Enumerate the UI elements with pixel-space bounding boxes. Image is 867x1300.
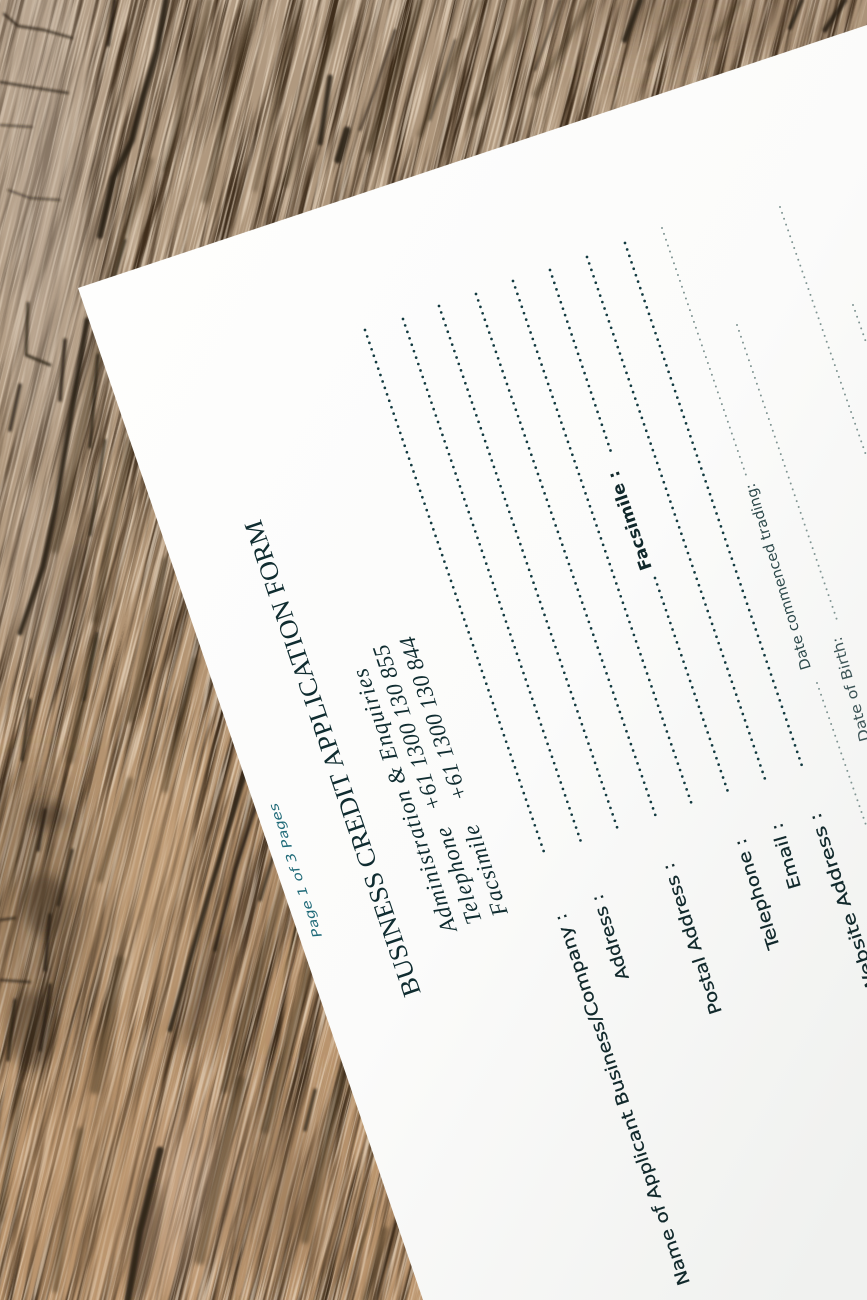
label: email: Email : — [767, 820, 806, 891]
telephone label: Telephone — [430, 824, 487, 928]
telephone number: +61 1300 130 855 — [368, 641, 447, 814]
label: applicant name: Name of Applicant Business/Company : — [551, 911, 695, 1288]
form field labels — [551, 468, 867, 1288]
facsimile label: Facsimile — [458, 822, 513, 920]
contact heading: Administration & Enquiries — [348, 665, 462, 938]
label: date commenced trading: Date commenced trading: — [743, 481, 815, 672]
dotted form lines — [365, 243, 802, 855]
contact details block — [348, 633, 513, 938]
faded dotted form lines — [662, 207, 867, 828]
label: postal address: Postal Address : — [659, 860, 727, 1017]
label: facsimile: Facsimile : — [604, 468, 656, 573]
label: telephone: Telephone : — [731, 836, 785, 953]
label: address: Address : — [588, 892, 634, 983]
page number: Page 1 of 3 Pages — [265, 801, 325, 940]
facsimile number: +61 1300 130 844 — [394, 633, 473, 804]
title: BUSINESS CREDIT APPLICATION FORM — [239, 517, 427, 1000]
